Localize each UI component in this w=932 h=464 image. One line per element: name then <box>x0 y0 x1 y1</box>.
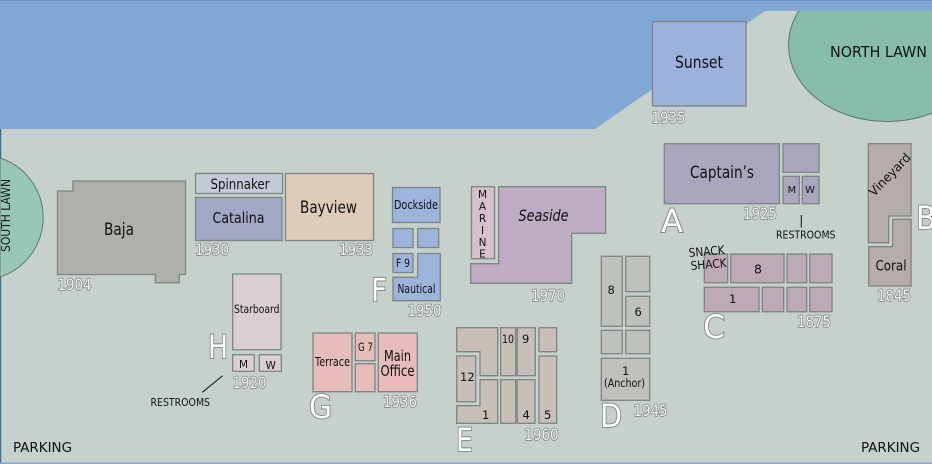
group F <box>371 188 442 320</box>
group H: M <box>239 359 248 371</box>
group D: 1 <box>622 364 629 378</box>
group E: 9 <box>522 332 529 346</box>
building: Bayview: 1933 <box>339 240 373 259</box>
group G: G 7 <box>358 340 373 354</box>
building: Sunset <box>652 22 746 127</box>
group C: 8 <box>754 262 762 276</box>
building: Seaside <box>471 187 606 305</box>
building: Coral <box>869 219 911 305</box>
group C: SNACK <box>688 243 726 260</box>
group F: F <box>371 271 387 309</box>
building: Coral: 1845 <box>877 286 911 305</box>
group A: A <box>661 202 683 240</box>
restrooms callout west: RESTROOMS <box>150 397 210 409</box>
group E: E <box>456 421 473 459</box>
building: Marine: A <box>479 201 487 213</box>
building: Marine: R <box>479 213 486 225</box>
group D: D <box>600 397 622 435</box>
building: Bayview: Bayview <box>300 198 357 218</box>
group C: 1875 <box>797 312 831 331</box>
building: Catalina: 1930 <box>195 240 229 259</box>
building: Sunset: 1935 <box>652 108 686 127</box>
building: Bayview <box>286 174 374 259</box>
group G: G <box>309 388 332 426</box>
restrooms callout west <box>150 376 223 409</box>
group F: Nautical <box>398 282 436 296</box>
group E: 1 <box>482 408 489 422</box>
building: Catalina: Catalina <box>212 209 264 227</box>
building: Sunset: Sunset <box>675 53 723 73</box>
group E <box>456 328 558 459</box>
group C <box>688 243 832 346</box>
building: Catalina <box>195 198 282 259</box>
building: Marine: M <box>478 189 487 201</box>
group A: M <box>788 185 796 196</box>
group D: (Anchor) <box>604 376 645 390</box>
building: Baja <box>58 181 186 294</box>
group E: 5 <box>544 408 551 422</box>
building: Baja: 1904 <box>58 275 92 294</box>
group C: 1 <box>729 292 736 306</box>
group F: 1950 <box>408 301 442 320</box>
group H: 1920 <box>232 373 266 392</box>
south lawn <box>0 158 43 277</box>
group D <box>600 256 668 435</box>
building: Spinnaker <box>196 174 282 194</box>
building: Spinnaker: Spinnaker <box>210 177 270 193</box>
building: Coral: Coral <box>876 258 906 274</box>
parking label west: PARKING <box>13 440 72 456</box>
group E: 1960 <box>524 425 558 444</box>
group H: Starboard <box>234 302 280 316</box>
group D: 1945 <box>634 401 668 420</box>
group G: Terrace <box>314 355 350 369</box>
group A: 1925 <box>743 204 777 223</box>
building: Vineyard: Vineyard <box>865 150 914 199</box>
group G: 1936 <box>383 392 417 411</box>
building: Marine <box>472 187 494 260</box>
group G <box>309 333 417 426</box>
group A <box>661 144 819 240</box>
building: Marine: I <box>481 225 484 237</box>
building: Baja: Baja <box>104 220 134 240</box>
restrooms callout east: RESTROOMS <box>776 230 836 242</box>
group D: 8 <box>608 283 615 297</box>
group E: 4 <box>522 408 530 422</box>
building: Vineyard <box>865 144 914 243</box>
group H: H <box>208 328 228 366</box>
building: Marine: N <box>479 237 486 249</box>
parking label east: PARKING <box>861 440 920 456</box>
group C: SHACK <box>690 256 728 273</box>
group C: C <box>703 308 725 346</box>
group G: Main <box>384 347 411 365</box>
group D: 6 <box>634 305 642 319</box>
group A: W <box>805 185 815 196</box>
group F: F 9 <box>396 256 410 270</box>
group F: Dockside <box>394 198 438 212</box>
group G: Office <box>380 362 414 380</box>
building: Seaside: Seaside <box>518 206 569 225</box>
water <box>0 0 932 129</box>
group A: Captain’s <box>690 163 754 183</box>
group E: 10 <box>502 332 514 346</box>
building: Seaside: 1970 <box>531 286 565 305</box>
group H: W <box>266 360 276 372</box>
north lawn <box>788 0 932 122</box>
building: Marine: E <box>479 248 486 260</box>
group H <box>208 274 281 392</box>
group E: 12 <box>460 370 475 384</box>
restrooms callout east <box>776 215 836 242</box>
